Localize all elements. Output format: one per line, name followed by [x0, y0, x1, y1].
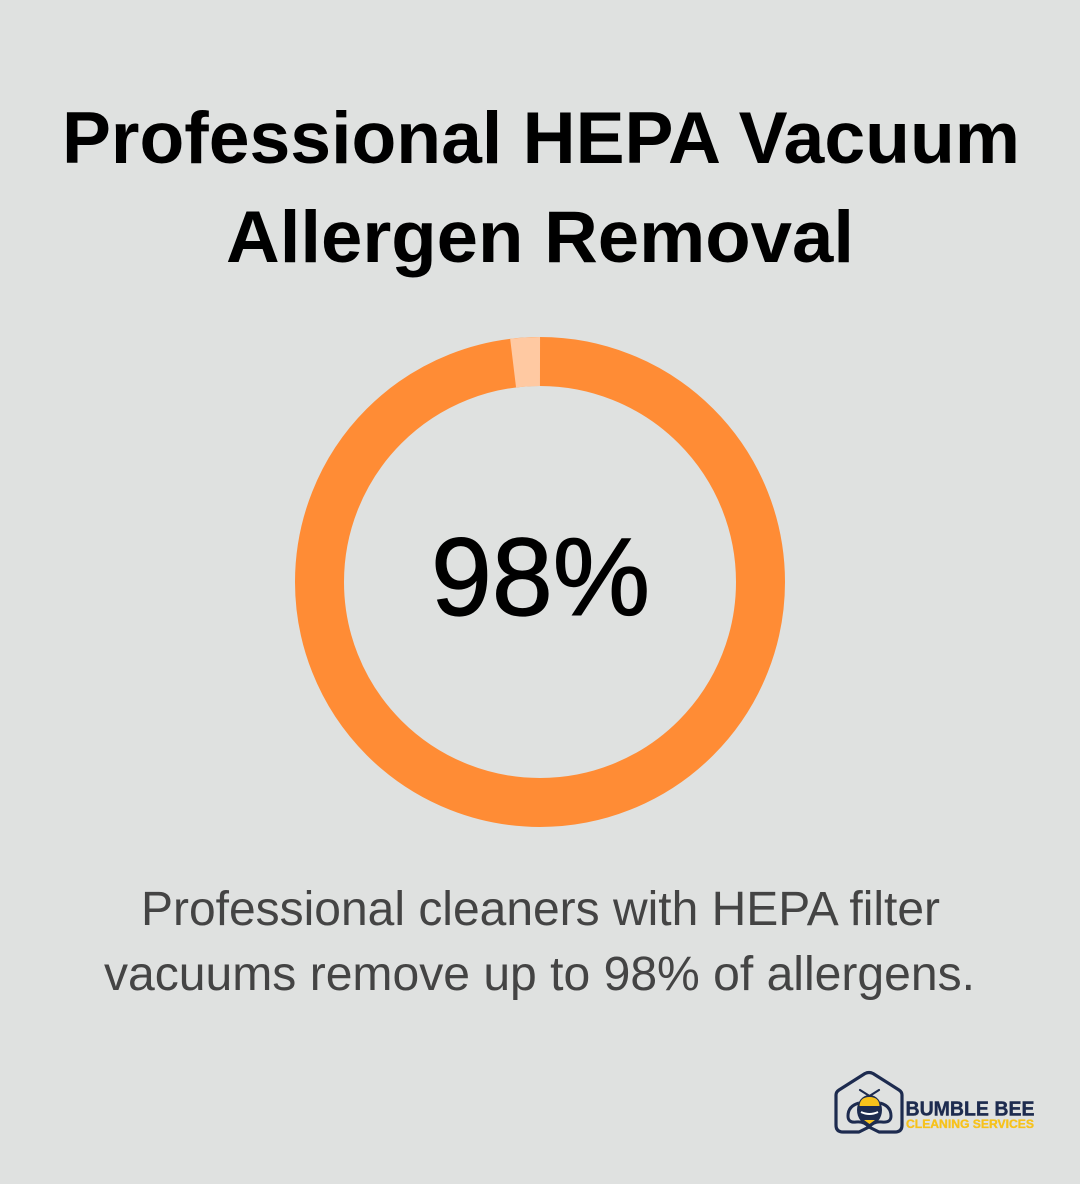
title: Allergen Removal	[226, 197, 854, 278]
title: Professional HEPA Vacuum	[62, 98, 1020, 179]
logo: Bumble Bee Cleaning Services	[836, 1072, 1034, 1132]
title	[62, 98, 1020, 278]
description text: vacuums remove up to 98% of allergens.	[104, 948, 975, 1001]
logo wordmark: BUMBLE BEE	[906, 1098, 1034, 1120]
donut chart: 98%	[320, 361, 760, 802]
icon: house outline	[836, 1072, 902, 1132]
description text	[104, 883, 975, 1001]
donut value: 98%	[431, 516, 650, 639]
description text: Professional cleaners with HEPA filter	[141, 883, 940, 936]
logo tagline: CLEANING SERVICES	[906, 1119, 1034, 1131]
icon: bee	[848, 1090, 891, 1127]
